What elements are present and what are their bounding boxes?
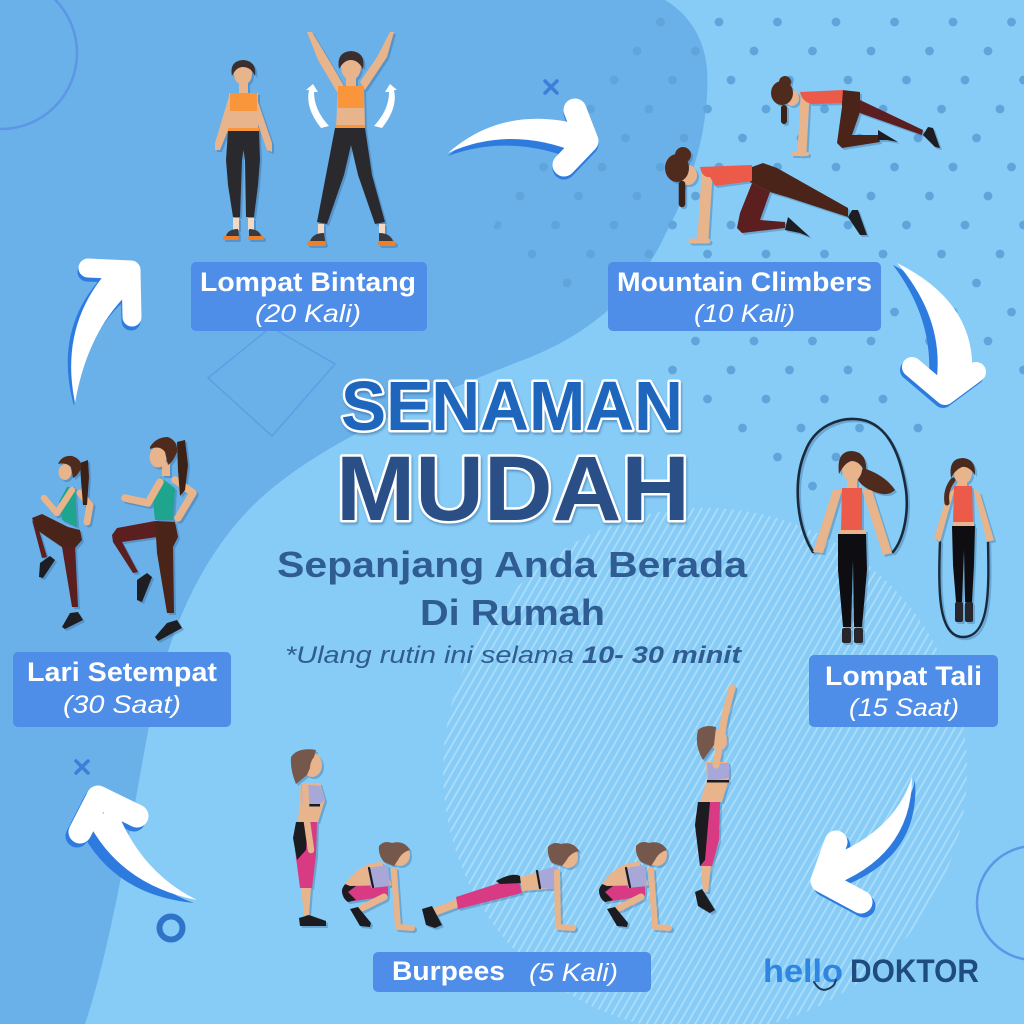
arrow: burpees to running: [77, 797, 197, 903]
label: Mountain Climbers: (10 Kali): [694, 300, 795, 328]
label: Mountain Climbers: Mountain Climbers: [617, 267, 872, 297]
figure: skipping rope small: [934, 458, 994, 637]
background blob: [0, 0, 707, 1024]
decorative diamond: [208, 327, 335, 436]
figure: mountain climber large: [665, 147, 867, 241]
cross mark top: [545, 81, 557, 93]
figure: mountain climber small: [771, 76, 940, 154]
small arrow left: [306, 84, 329, 128]
striped circle: [443, 508, 967, 1024]
logo: helloDOKTOR: [763, 953, 979, 990]
label: Lompat Tali: (15 Saat): [849, 694, 959, 722]
cross mark bottom: [76, 761, 88, 773]
subtitle: [277, 544, 748, 633]
arrow: star jump to mountain climbers: [448, 110, 587, 168]
label: Lari Setempat: (30 Saat): [63, 691, 181, 719]
figure: burpee crouch 2: [599, 842, 669, 928]
figure: burpee standing: [291, 749, 326, 926]
label: Lompat Bintang: Lompat Bintang: [200, 267, 416, 297]
small arrow right: [374, 84, 397, 128]
subtitle: Sepanjang Anda Berada: [277, 544, 748, 585]
logo: helloDOKTOR: DOKTOR: [850, 953, 979, 989]
figure: burpee crouch 1: [342, 842, 412, 928]
logo: helloDOKTOR: hello: [763, 953, 843, 989]
decorative circle right: [977, 846, 1024, 960]
label: Lari Setempat: Lari Setempat: [27, 657, 217, 687]
figure: star jump standing: [215, 60, 272, 240]
arrow: mountain climbers to skipping: [893, 263, 976, 398]
label: Burpees: (5 Kali): [529, 959, 618, 987]
figure: burpee jump: [695, 688, 732, 913]
figure: running large: [112, 437, 193, 641]
figure: burpee plank: [422, 843, 579, 928]
label: Mountain Climbers: [608, 262, 881, 331]
label: Lompat Bintang: [191, 262, 427, 331]
note: *Ulang rutin ini selama 10- 30 minit: [285, 642, 742, 669]
label: Lompat Tali: Lompat Tali: [825, 661, 982, 691]
decorative circle top left: [0, 0, 77, 129]
figure: running small: [32, 456, 90, 629]
arrow: running to star jump: [68, 262, 134, 406]
label: Lompat Tali: [809, 655, 998, 727]
figure: skipping rope large: [798, 419, 907, 643]
arrow: skipping to burpees: [822, 777, 915, 906]
subtitle: Di Rumah: [420, 592, 605, 633]
title: SENAMAN: SENAMAN: [341, 367, 683, 445]
title: MUDAH: MUDAH: [336, 438, 690, 540]
dot pattern: [485, 0, 1024, 495]
label: Burpees: [373, 952, 651, 992]
figure: star jump arms up: [307, 32, 396, 246]
ring: [160, 916, 182, 940]
label: Lompat Bintang: (20 Kali): [255, 300, 361, 328]
label: Burpees: Burpees: [392, 956, 505, 986]
label: Lari Setempat: [13, 652, 231, 727]
